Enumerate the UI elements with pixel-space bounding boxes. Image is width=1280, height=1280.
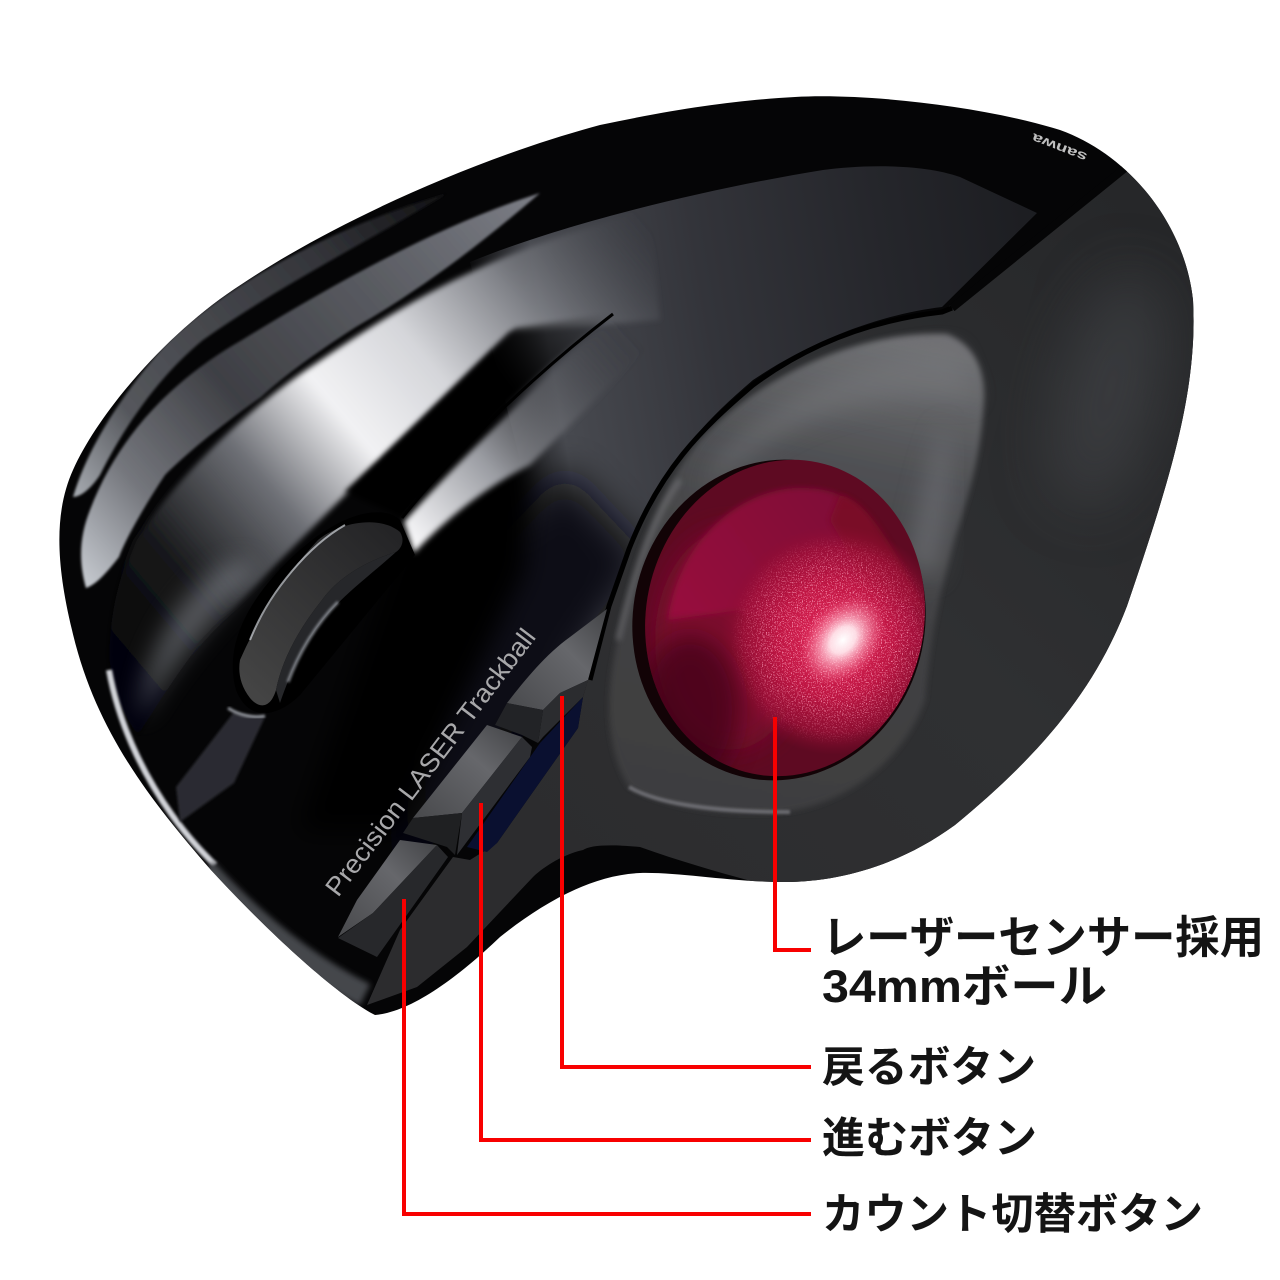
black border along matte edge [952,160,1135,308]
label: laser sensor, 34mm ball: レーザーセンサー採用 [822,912,1264,963]
label: forward button: 進むボタン [822,1115,1037,1163]
socket left rim [618,480,680,640]
label: laser sensor, 34mm ball: 34mmボール [822,961,1107,1012]
socket highlight [714,372,946,476]
printed text: Precision LASER Trackball: Precision LASER Trackball [319,623,542,902]
black wedge above crease [342,318,600,496]
ball upper lobe [668,488,930,650]
matte grip area [367,163,1210,1005]
side buttons [338,609,607,957]
ball lower-left shade [640,635,740,785]
scroll wheel [176,512,415,822]
label: laser sensor, 34mm ball [822,912,1264,1012]
ball metallic speckle [733,538,925,742]
logo: sanwa supply: sanwa [1029,130,1089,165]
leader line: count button [404,899,811,1214]
mouse body [59,96,1210,1015]
ball left mid-tone [648,530,778,754]
outer gloss band [73,193,448,497]
white rim highlight [109,670,215,865]
matte right light [1056,288,1167,487]
grey top panel [472,166,1037,634]
second gloss band [81,193,540,588]
leader line: forward button [481,803,811,1140]
label: count switch button: カウント切替ボタン [822,1191,1203,1239]
forward button [413,725,522,818]
ball bright region [730,536,925,750]
trackball [632,460,926,780]
leader line: trackball [775,717,811,950]
back button [507,609,607,710]
trackball socket [609,334,984,813]
ball darker top-right reflection [830,496,904,576]
black region left of the diagonal [392,465,538,822]
front key piece [176,712,265,822]
count button [338,840,437,937]
ball specular highlight [802,598,884,682]
main gloss band [126,230,658,650]
bright band below crease [400,364,596,556]
lower grey rim [205,870,365,995]
dark centre shading [425,458,640,801]
label: back button: 戻るボタン [822,1044,1036,1092]
socket right-side light [906,450,954,577]
crease line [402,314,613,518]
lower-left sheen on main band [140,562,260,720]
socket groove [590,308,952,680]
leader line: back button [562,696,811,1067]
blue LED window [467,697,583,852]
socket lower lip [629,787,790,812]
